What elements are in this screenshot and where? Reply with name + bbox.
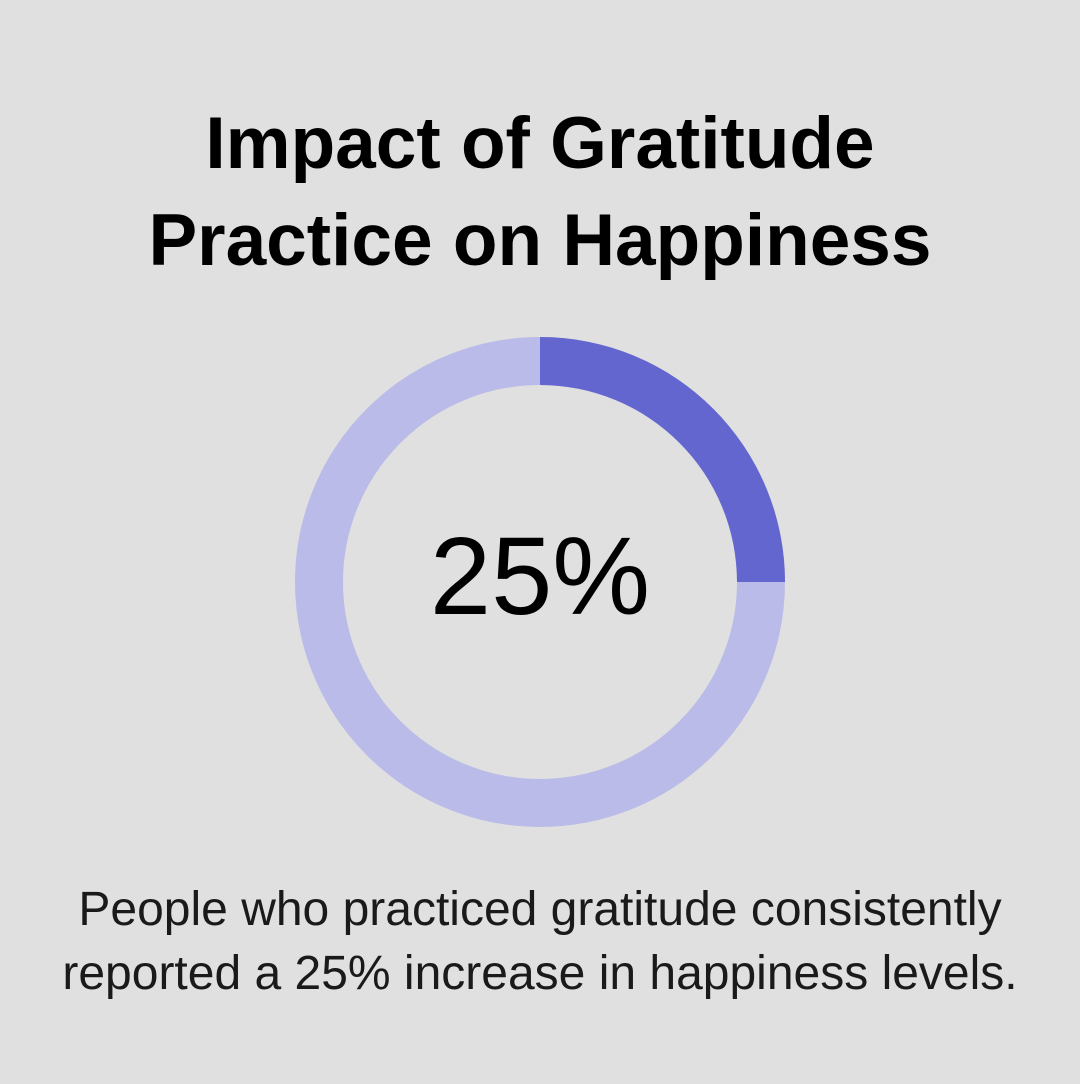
caption <box>62 883 1018 1000</box>
caption: reported a 25% increase in happiness levels. <box>62 947 1018 1000</box>
title: Practice on Happiness <box>148 200 932 281</box>
caption: People who practiced gratitude consistently <box>78 883 1002 936</box>
title: Impact of Gratitude <box>205 103 875 184</box>
donut value arc 25% <box>540 337 785 582</box>
center value: 25% <box>430 515 650 638</box>
title <box>148 103 932 281</box>
donut track <box>319 361 761 803</box>
